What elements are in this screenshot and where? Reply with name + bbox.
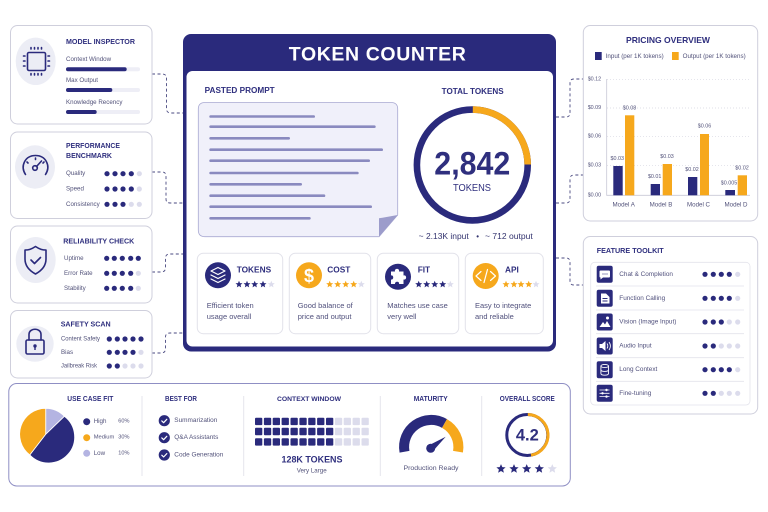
card: api: Easy to integrate bbox=[475, 301, 531, 310]
ratings: performance: Speed bbox=[66, 186, 84, 192]
panel: feature toolkit bbox=[583, 236, 758, 414]
card: cost: COST bbox=[327, 264, 350, 274]
heading: safety scan: SAFETY SCAN bbox=[61, 320, 111, 328]
icon: padlock bbox=[16, 326, 54, 362]
panel: performance benchmark: BENCHMARK bbox=[66, 151, 113, 160]
bar chart: price per model: $0.03 bbox=[611, 156, 624, 162]
heading: pasted prompt: PASTED PROMPT bbox=[205, 86, 275, 95]
row: function calling: Function Calling bbox=[619, 295, 666, 302]
row: long context bbox=[597, 361, 740, 378]
section: best for bbox=[159, 396, 224, 461]
bar chart: price per model: $0.09 bbox=[588, 105, 601, 111]
section: context window: 128K TOKENS bbox=[282, 454, 343, 464]
row: vision bbox=[597, 314, 740, 330]
panel: token counter main card bbox=[183, 34, 556, 352]
card: fit bbox=[377, 253, 459, 334]
bar chart: price per model: $0.03 bbox=[588, 163, 601, 169]
ratings: performance: Quality bbox=[66, 170, 86, 177]
card: fit: FIT bbox=[418, 264, 430, 274]
bar chart: price per model: $0.12 bbox=[588, 76, 601, 82]
donut chart: total tokens: 2,842 bbox=[434, 145, 510, 181]
row: long context: Long Context bbox=[619, 366, 658, 373]
section: maturity gauge: MATURITY bbox=[414, 396, 448, 403]
ratings: safety: Jailbreak Risk bbox=[61, 362, 98, 370]
section: use case fit: 60% bbox=[118, 419, 130, 425]
bar chart: price per model: Model C bbox=[687, 202, 711, 208]
panel: performance benchmark bbox=[10, 132, 152, 218]
legend: input and output: Output (per 1K tokens) bbox=[683, 53, 746, 60]
section: use case fit: 10% bbox=[118, 450, 130, 456]
section: overall score: 4.2 bbox=[516, 426, 539, 444]
token split caption: ~ 2.13K input bbox=[419, 232, 470, 241]
bar chart: price per model: $0.005 bbox=[721, 180, 737, 186]
heading: feature toolkit: FEATURE TOOLKIT bbox=[597, 246, 664, 255]
section: use case fit: Medium bbox=[94, 435, 114, 441]
row: audio input bbox=[597, 338, 740, 354]
donut chart: total tokens bbox=[417, 110, 528, 220]
section: maturity gauge: Production Ready bbox=[404, 465, 460, 472]
bar chart: price per model: Model A bbox=[613, 202, 636, 208]
section: best for: Code Generation bbox=[174, 452, 224, 458]
token split caption bbox=[419, 232, 534, 241]
section: use case fit bbox=[20, 396, 130, 463]
card: tokens: Efficient token bbox=[207, 301, 254, 310]
bar chart: price per model: $0.03 bbox=[660, 154, 674, 160]
panel: pricing overview bbox=[583, 26, 758, 221]
panel: safety scan bbox=[10, 310, 152, 378]
connectors: main card to right panels bbox=[556, 79, 583, 285]
card: api: API bbox=[505, 264, 519, 274]
icon: shield bbox=[16, 237, 56, 283]
card: fit: very well bbox=[387, 312, 417, 321]
connectors: left panels to main card bbox=[152, 74, 183, 353]
section: best for: Summarization bbox=[174, 417, 218, 424]
pie chart bbox=[20, 408, 75, 463]
row: fine-tuning: Fine-tuning bbox=[619, 390, 652, 397]
token split caption: • bbox=[476, 232, 479, 241]
bars: model metrics: Context Window bbox=[66, 56, 112, 63]
bar chart: price per model: $0.01 bbox=[648, 174, 661, 180]
section: best for: Q&A Assistants bbox=[174, 434, 218, 441]
section: best for: BEST FOR bbox=[165, 396, 197, 403]
bar chart: price per model: $0.06 bbox=[698, 124, 711, 130]
ratings: safety: Bias bbox=[61, 349, 73, 356]
bar chart: price per model: $0.02 bbox=[685, 167, 699, 173]
section: context window: CONTEXT WINDOW bbox=[277, 396, 342, 403]
heading: reliability check: RELIABILITY CHECK bbox=[63, 236, 135, 246]
ratings: safety bbox=[61, 336, 144, 370]
ratings: performance: Consistency bbox=[66, 201, 101, 208]
card: tokens bbox=[197, 253, 283, 334]
bar chart: price per model: $0.08 bbox=[623, 105, 636, 111]
bars: model metrics: Max Output bbox=[66, 77, 98, 84]
heading: total tokens: TOTAL TOKENS bbox=[442, 87, 504, 96]
donut chart: total tokens: TOKENS bbox=[453, 183, 491, 194]
bar chart: price per model: $0.06 bbox=[588, 134, 601, 140]
card: cost: Good balance of bbox=[298, 301, 354, 310]
panel: bottom summary bbox=[9, 384, 570, 486]
panel: reliability check bbox=[10, 226, 152, 303]
bar chart: price per model bbox=[588, 76, 750, 208]
row: audio input: Audio Input bbox=[619, 342, 652, 350]
heading: model inspector: MODEL INSPECTOR bbox=[66, 37, 136, 46]
panel: model inspector bbox=[10, 26, 152, 124]
section: context window bbox=[255, 396, 369, 474]
card: api: and reliable bbox=[475, 312, 514, 321]
icon: speedometer bbox=[15, 145, 55, 189]
section: maturity gauge bbox=[404, 396, 460, 472]
section: use case fit: 30% bbox=[118, 435, 130, 441]
bars: model metrics bbox=[66, 56, 140, 114]
row: function calling bbox=[597, 290, 740, 307]
feature list bbox=[591, 262, 750, 405]
row: fine-tuning bbox=[597, 385, 740, 402]
document with prompt lines bbox=[198, 102, 398, 237]
card: api bbox=[465, 253, 543, 334]
card: tokens: usage overall bbox=[207, 312, 252, 321]
ratings: reliability bbox=[64, 255, 141, 292]
waffle grid bbox=[255, 418, 369, 446]
ratings: reliability: Error Rate bbox=[64, 270, 93, 277]
legend: input and output bbox=[595, 52, 746, 60]
section: overall score: OVERALL SCORE bbox=[500, 396, 555, 403]
bar chart: price per model: Model D bbox=[724, 202, 748, 208]
ratings: reliability: Uptime bbox=[64, 255, 84, 262]
bar chart: price per model: $0.02 bbox=[735, 165, 749, 171]
heading: performance benchmark: PERFORMANCE bbox=[66, 141, 120, 150]
section: use case fit: Low bbox=[94, 450, 106, 457]
card: cost bbox=[289, 253, 371, 334]
ratings: performance bbox=[66, 170, 142, 208]
section: use case fit: USE CASE FIT bbox=[67, 396, 114, 403]
row: vision: Vision (Image Input) bbox=[619, 318, 676, 326]
token split caption: ~ 712 output bbox=[485, 232, 534, 241]
legend: input and output: Input (per 1K tokens) bbox=[606, 53, 664, 60]
card: cost: price and output bbox=[298, 312, 352, 321]
bar chart: price per model: Model B bbox=[650, 202, 672, 208]
ratings: safety: Content Safety bbox=[61, 336, 101, 342]
heading: pricing overview: PRICING OVERVIEW bbox=[626, 35, 710, 45]
row: chat and completion bbox=[597, 266, 740, 283]
title: TOKEN COUNTER bbox=[289, 43, 466, 65]
ratings: reliability: Stability bbox=[64, 285, 87, 292]
card: cost: $ bbox=[304, 266, 314, 286]
row: chat and completion: Chat & Completion bbox=[619, 271, 673, 278]
card: fit: Matches use case bbox=[387, 301, 448, 310]
section: overall score bbox=[496, 396, 557, 473]
icon: processor chip bbox=[16, 38, 56, 85]
bar chart: price per model: $0.00 bbox=[588, 192, 601, 198]
card: tokens: TOKENS bbox=[237, 264, 272, 274]
section: context window: Very Large bbox=[297, 468, 327, 474]
bars: model metrics: Knowledge Recency bbox=[66, 99, 123, 106]
section: use case fit: High bbox=[94, 418, 107, 425]
